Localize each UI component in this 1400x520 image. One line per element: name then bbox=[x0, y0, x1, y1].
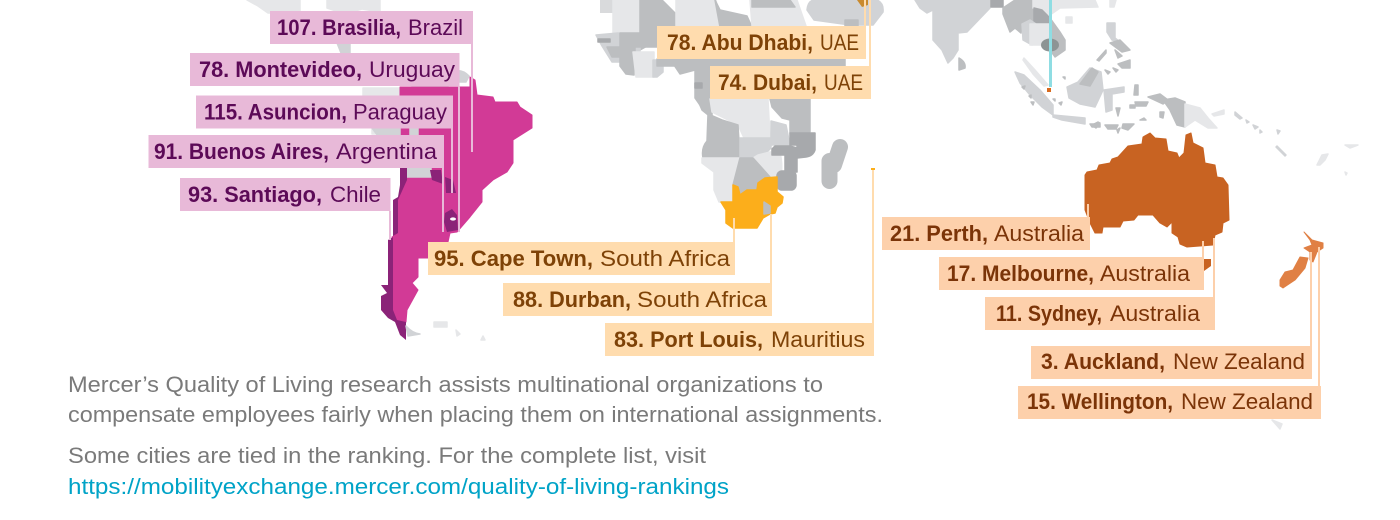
label: Sydney: 11. Sydney, bbox=[996, 301, 1102, 326]
label: Buenos Aires: 91. Buenos Aires, bbox=[154, 139, 329, 164]
label: Dubai bbox=[710, 0, 871, 99]
label: Cape Town: South Africa bbox=[600, 246, 731, 271]
map: Australia highlighted in rust bbox=[1085, 133, 1229, 271]
map: South Africa highlighted in amber bbox=[721, 177, 783, 228]
label: Auckland: 3. Auckland, bbox=[1041, 349, 1165, 374]
label: Durban: South Africa bbox=[637, 287, 768, 312]
text block: research description bbox=[68, 372, 883, 427]
Africa and Middle East city labels bbox=[428, 0, 875, 356]
South America city labels bbox=[148, 11, 473, 240]
label: Brasilia bbox=[270, 11, 473, 152]
label: Melbourne: 17. Melbourne, bbox=[947, 261, 1094, 286]
label: Wellington bbox=[1018, 247, 1321, 419]
label: Buenos Aires: Argentina bbox=[336, 139, 438, 164]
label: Brasilia: Brazil bbox=[408, 15, 463, 40]
map: New Zealand highlighted in light rust bbox=[1280, 232, 1323, 288]
label: Port Louis: 83. Port Louis, bbox=[614, 327, 763, 352]
map: Arabian highlight at top bbox=[857, 0, 868, 7]
label: Durban: 88. Durban, bbox=[513, 287, 631, 312]
label: Sydney: Australia bbox=[1110, 301, 1201, 326]
label: Dubai: 74. Dubai, bbox=[718, 70, 817, 95]
text block: ranking note and link bbox=[68, 443, 729, 499]
label: Montevideo: 78. Montevideo, bbox=[199, 57, 362, 82]
label: Sydney bbox=[985, 238, 1215, 330]
label: Dubai: UAE bbox=[824, 70, 863, 95]
label: Perth: Australia bbox=[994, 221, 1085, 246]
world map bbox=[247, 0, 1358, 429]
label: Port Louis bbox=[605, 168, 875, 356]
map: Africa and Arabia in grey bbox=[596, 0, 883, 202]
text block: research description: compensate employees fairly when placing them on international assignments. bbox=[68, 402, 883, 427]
map: South America highlighted in magenta and purple bbox=[372, 77, 532, 340]
map: Caribbean and Central America in grey bbox=[247, 0, 469, 134]
map: Asia and Indonesia in grey bbox=[915, 0, 1358, 429]
label: Abu Dhabi: 78. Abu Dhabi, bbox=[667, 30, 813, 55]
label: Asuncion: 115. Asuncion, bbox=[204, 100, 347, 124]
label: Santiago: 93. Santiago, bbox=[188, 182, 322, 207]
label: Abu Dhabi bbox=[657, 0, 866, 59]
label: Perth: 21. Perth, bbox=[890, 221, 988, 246]
label: Buenos Aires bbox=[148, 135, 444, 232]
label: Asuncion: Paraguay bbox=[353, 100, 447, 124]
Oceania city labels bbox=[882, 204, 1321, 419]
map: Singapore marker and leader bbox=[1047, 0, 1051, 92]
label: Auckland: New Zealand bbox=[1173, 349, 1305, 374]
label: Montevideo: Uruguay bbox=[369, 57, 455, 82]
label: Brasilia: 107. Brasilia, bbox=[277, 15, 401, 40]
label: Wellington: 15. Wellington, bbox=[1027, 389, 1173, 414]
label: Port Louis: Mauritius bbox=[771, 327, 865, 352]
text block: ranking note and link: https://mobilityexchange.mercer.com/quality-of-living-rankings bbox=[68, 474, 729, 499]
label: Melbourne: Australia bbox=[1100, 261, 1191, 286]
text block: research description: Mercer’s Quality of Living research assists multinational organizations to bbox=[68, 372, 823, 397]
label: Cape Town: 95. Cape Town, bbox=[434, 246, 593, 271]
label: Abu Dhabi: UAE bbox=[820, 30, 859, 55]
label: Cape Town bbox=[428, 218, 735, 275]
label: Auckland bbox=[1031, 252, 1312, 379]
label: Santiago: Chile bbox=[330, 182, 381, 207]
label: Santiago bbox=[180, 178, 391, 240]
text block: ranking note and link: Some cities are tied in the ranking. For the complete list, visit bbox=[68, 443, 706, 468]
label: Asuncion bbox=[196, 96, 453, 193]
label: Wellington: New Zealand bbox=[1181, 389, 1313, 414]
label: Melbourne bbox=[939, 241, 1204, 290]
label: Montevideo bbox=[190, 53, 460, 232]
label: Durban bbox=[503, 214, 772, 316]
label: Perth bbox=[882, 204, 1090, 250]
